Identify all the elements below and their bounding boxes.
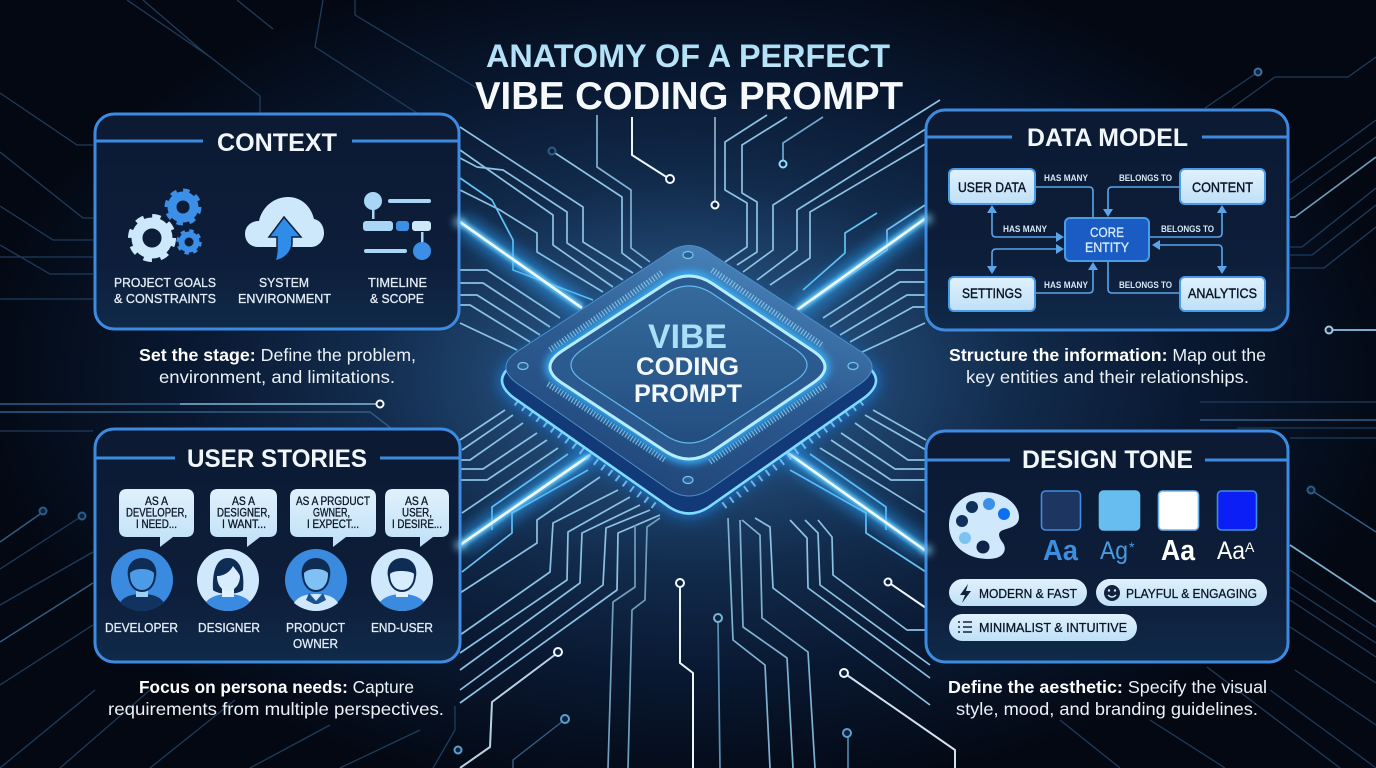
labels: personas xyxy=(105,620,433,651)
caption: data model xyxy=(949,345,1266,387)
labels: context items: SYSTEM xyxy=(259,275,309,290)
title: ANATOMY OF A PERFECT xyxy=(486,38,890,74)
speech bubble: designer: AS A xyxy=(232,496,255,508)
caption: user stories: requirements from multiple perspectives. xyxy=(108,699,444,719)
type samples: Ag xyxy=(1100,537,1128,565)
heading: data model: DATA MODEL xyxy=(1027,124,1188,152)
icon: gears xyxy=(131,191,200,259)
colour swatches xyxy=(1042,491,1256,530)
relation labels: HAS MANY xyxy=(1003,224,1048,235)
type samples: * xyxy=(1129,539,1135,555)
caption: design tone: Define the aesthetic: Specify the visual xyxy=(948,677,1267,697)
type samples: A xyxy=(1245,539,1255,555)
relation labels: BELONGS TO xyxy=(1161,224,1214,235)
speech bubble: product owner: AS A PRGDUCT xyxy=(296,496,370,508)
node: settings xyxy=(949,277,1035,311)
labels: context items xyxy=(114,275,427,306)
caption: context xyxy=(139,345,416,387)
tag: minimalist and intuitive xyxy=(949,614,1137,641)
panel: context xyxy=(95,114,459,329)
labels: context items: TIMELINE xyxy=(368,275,427,290)
labels: personas: END-USER xyxy=(371,620,433,635)
speech bubble: designer xyxy=(210,489,277,547)
light flares at panel edges xyxy=(454,214,932,555)
speech bubble: developer: DEVELOPER, xyxy=(126,508,187,520)
avatar: end-user xyxy=(371,549,433,611)
avatar: product owner xyxy=(285,549,347,611)
type samples: Aa xyxy=(1043,535,1079,567)
heading: design tone: DESIGN TONE xyxy=(1022,446,1193,474)
caption: user stories xyxy=(108,677,444,719)
chip contact tips xyxy=(516,402,862,510)
heading: context: CONTEXT xyxy=(217,129,337,157)
caption: data model: key entities and their relationships. xyxy=(966,367,1249,387)
relation labels xyxy=(1003,173,1214,291)
chip screws xyxy=(518,252,858,484)
node: content xyxy=(1180,169,1265,204)
labels: personas: PRODUCT xyxy=(286,620,345,635)
caption: design tone: style, mood, and branding guidelines. xyxy=(956,699,1258,719)
panel: data model xyxy=(926,110,1288,330)
labels: context items: PROJECT GOALS xyxy=(114,275,216,290)
chip label: CODING xyxy=(636,353,739,381)
node: core entity: CORE xyxy=(1090,225,1124,240)
caption: design tone xyxy=(948,677,1267,719)
speech bubble: product owner xyxy=(290,489,376,547)
chip under-glow xyxy=(502,263,876,514)
relation labels: BELONGS TO xyxy=(1119,173,1172,184)
speech bubble: end-user: USER, xyxy=(402,508,432,520)
chip label xyxy=(634,318,742,408)
labels: context items: ENVIRONMENT xyxy=(238,291,331,306)
type samples: Aa xyxy=(1217,537,1245,565)
heading: user stories: USER STORIES xyxy=(187,445,367,473)
chip label: PROMPT xyxy=(634,380,742,408)
title: VIBE CODING PROMPT xyxy=(475,75,903,118)
caption: context: environment, and limitations. xyxy=(159,367,395,387)
node: core entity: ENTITY xyxy=(1085,240,1129,255)
chip glowing ring xyxy=(550,276,825,459)
panel: design tone xyxy=(926,431,1288,662)
circuit traces: bottom centre xyxy=(460,518,955,768)
circuit traces: bottom right of chip xyxy=(790,410,926,572)
speech bubble: product owner: I EXPECT... xyxy=(307,519,359,531)
speech bubble: designer: DESIGNER, xyxy=(217,508,270,520)
tag: playful and engaging: PLAYFUL & ENGAGING xyxy=(1126,586,1257,601)
tag: playful and engaging xyxy=(1096,579,1267,606)
speech bubble: end-user: I DESIRE... xyxy=(392,519,442,531)
chip contact pins xyxy=(548,270,827,462)
node: analytics: ANALYTICS xyxy=(1188,286,1257,301)
speech bubble: end-user: AS A xyxy=(405,496,428,508)
speech bubble: developer: I NEED... xyxy=(136,519,177,531)
speech bubble: developer xyxy=(119,489,194,547)
labels: context items: & CONSTRAINTS xyxy=(114,291,216,306)
node: core entity xyxy=(1065,218,1149,261)
title xyxy=(475,38,903,118)
panel: user stories xyxy=(95,429,460,662)
glowing main traces xyxy=(460,218,926,551)
speech bubble: designer: I WANT... xyxy=(222,519,266,531)
speech bubble: end-user xyxy=(385,489,449,547)
labels: personas: DEVELOPER xyxy=(105,620,178,635)
chip top surface xyxy=(506,246,872,496)
tag: modern and fast xyxy=(949,579,1087,606)
type samples: Aa xyxy=(1161,535,1196,567)
relation labels: BELONGS TO xyxy=(1119,280,1172,291)
tag: modern and fast: MODERN & FAST xyxy=(979,586,1077,601)
speech bubble: product owner: GWNER, xyxy=(313,508,350,520)
node: analytics xyxy=(1180,277,1265,311)
node: content: CONTENT xyxy=(1192,180,1253,195)
central chip xyxy=(502,246,876,514)
avatar: designer xyxy=(197,549,259,611)
connectors xyxy=(987,187,1227,293)
relation labels: HAS MANY xyxy=(1044,173,1089,184)
circuit traces: far right faint xyxy=(1060,57,1376,768)
icon: cloud upload xyxy=(245,197,324,261)
icon: timeline xyxy=(363,192,431,260)
speech bubble: developer: AS A xyxy=(145,496,168,508)
chip ring core xyxy=(550,276,825,459)
chip inner tile xyxy=(571,286,807,443)
icon: palette xyxy=(949,492,1019,559)
caption: data model: Structure the information: Map out the xyxy=(949,345,1266,365)
chip base xyxy=(502,263,876,514)
node: user data xyxy=(949,169,1035,204)
labels: personas: DESIGNER xyxy=(198,620,260,635)
caption: context: Set the stage: Define the problem, xyxy=(139,345,416,365)
node: user data: USER DATA xyxy=(958,180,1026,195)
chip label: VIBE xyxy=(648,318,727,356)
type samples xyxy=(1043,535,1255,567)
node: settings: SETTINGS xyxy=(962,286,1022,301)
tag: minimalist and intuitive: MINIMALIST & INTUITIVE xyxy=(979,620,1127,635)
avatar: developer xyxy=(111,549,173,611)
circuit traces: top of chip xyxy=(460,100,940,353)
relation labels: HAS MANY xyxy=(1044,280,1089,291)
circuit traces: bottom left of chip xyxy=(460,410,660,703)
circuit traces: far left and top faint xyxy=(0,0,480,768)
caption: user stories: Focus on persona needs: Capture xyxy=(139,677,414,697)
labels: context items: & SCOPE xyxy=(370,291,424,306)
labels: personas: OWNER xyxy=(293,636,338,651)
